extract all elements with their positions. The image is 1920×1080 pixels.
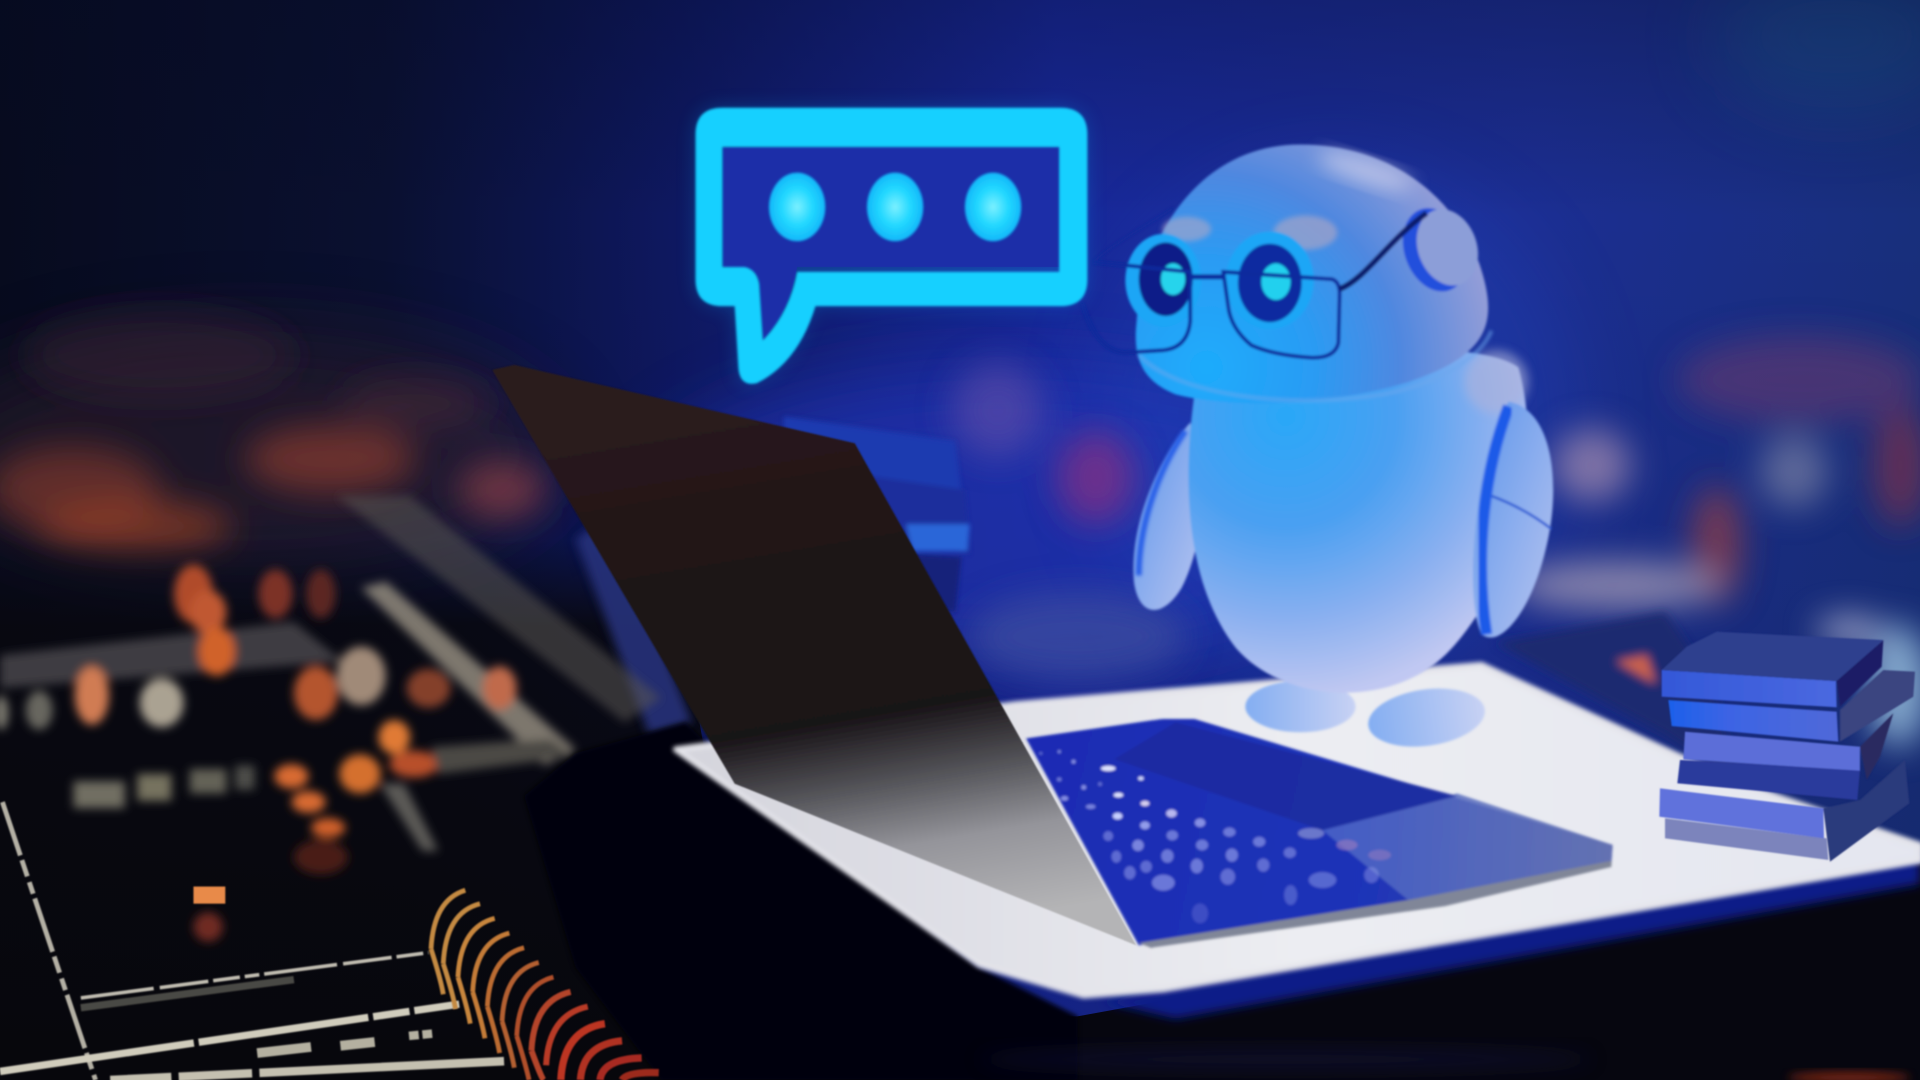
robot shoulder — [1464, 350, 1528, 414]
keyboard keys — [1039, 750, 1391, 923]
laptop keyboard deck — [1026, 719, 1613, 948]
tablet behind at right — [1496, 612, 1739, 784]
speech bubble icon — [696, 108, 1087, 384]
robot feet — [1245, 681, 1489, 754]
blurred city lights right — [951, 336, 1920, 747]
robot right arm — [1473, 402, 1553, 638]
books behind laptop — [784, 416, 970, 612]
spiral binding coil — [431, 890, 659, 1080]
robot head — [1136, 144, 1488, 403]
laptop lid — [492, 365, 1136, 945]
blurred city lights left — [0, 311, 546, 553]
glowing white platform — [676, 665, 1920, 996]
robot eyes — [1125, 231, 1314, 329]
bubble glow — [696, 108, 1087, 384]
robot left arm — [1133, 422, 1201, 610]
robot ear — [1392, 199, 1488, 301]
robot glasses — [1082, 208, 1427, 358]
robot — [1082, 144, 1553, 754]
typing dots — [769, 173, 1021, 241]
robot body — [1188, 349, 1528, 693]
bubble outline — [696, 108, 1087, 384]
desk foreground — [524, 722, 1920, 1080]
circuit traces — [0, 802, 520, 1080]
circuit board bottom left — [0, 496, 710, 1080]
book stack right — [1659, 632, 1915, 862]
